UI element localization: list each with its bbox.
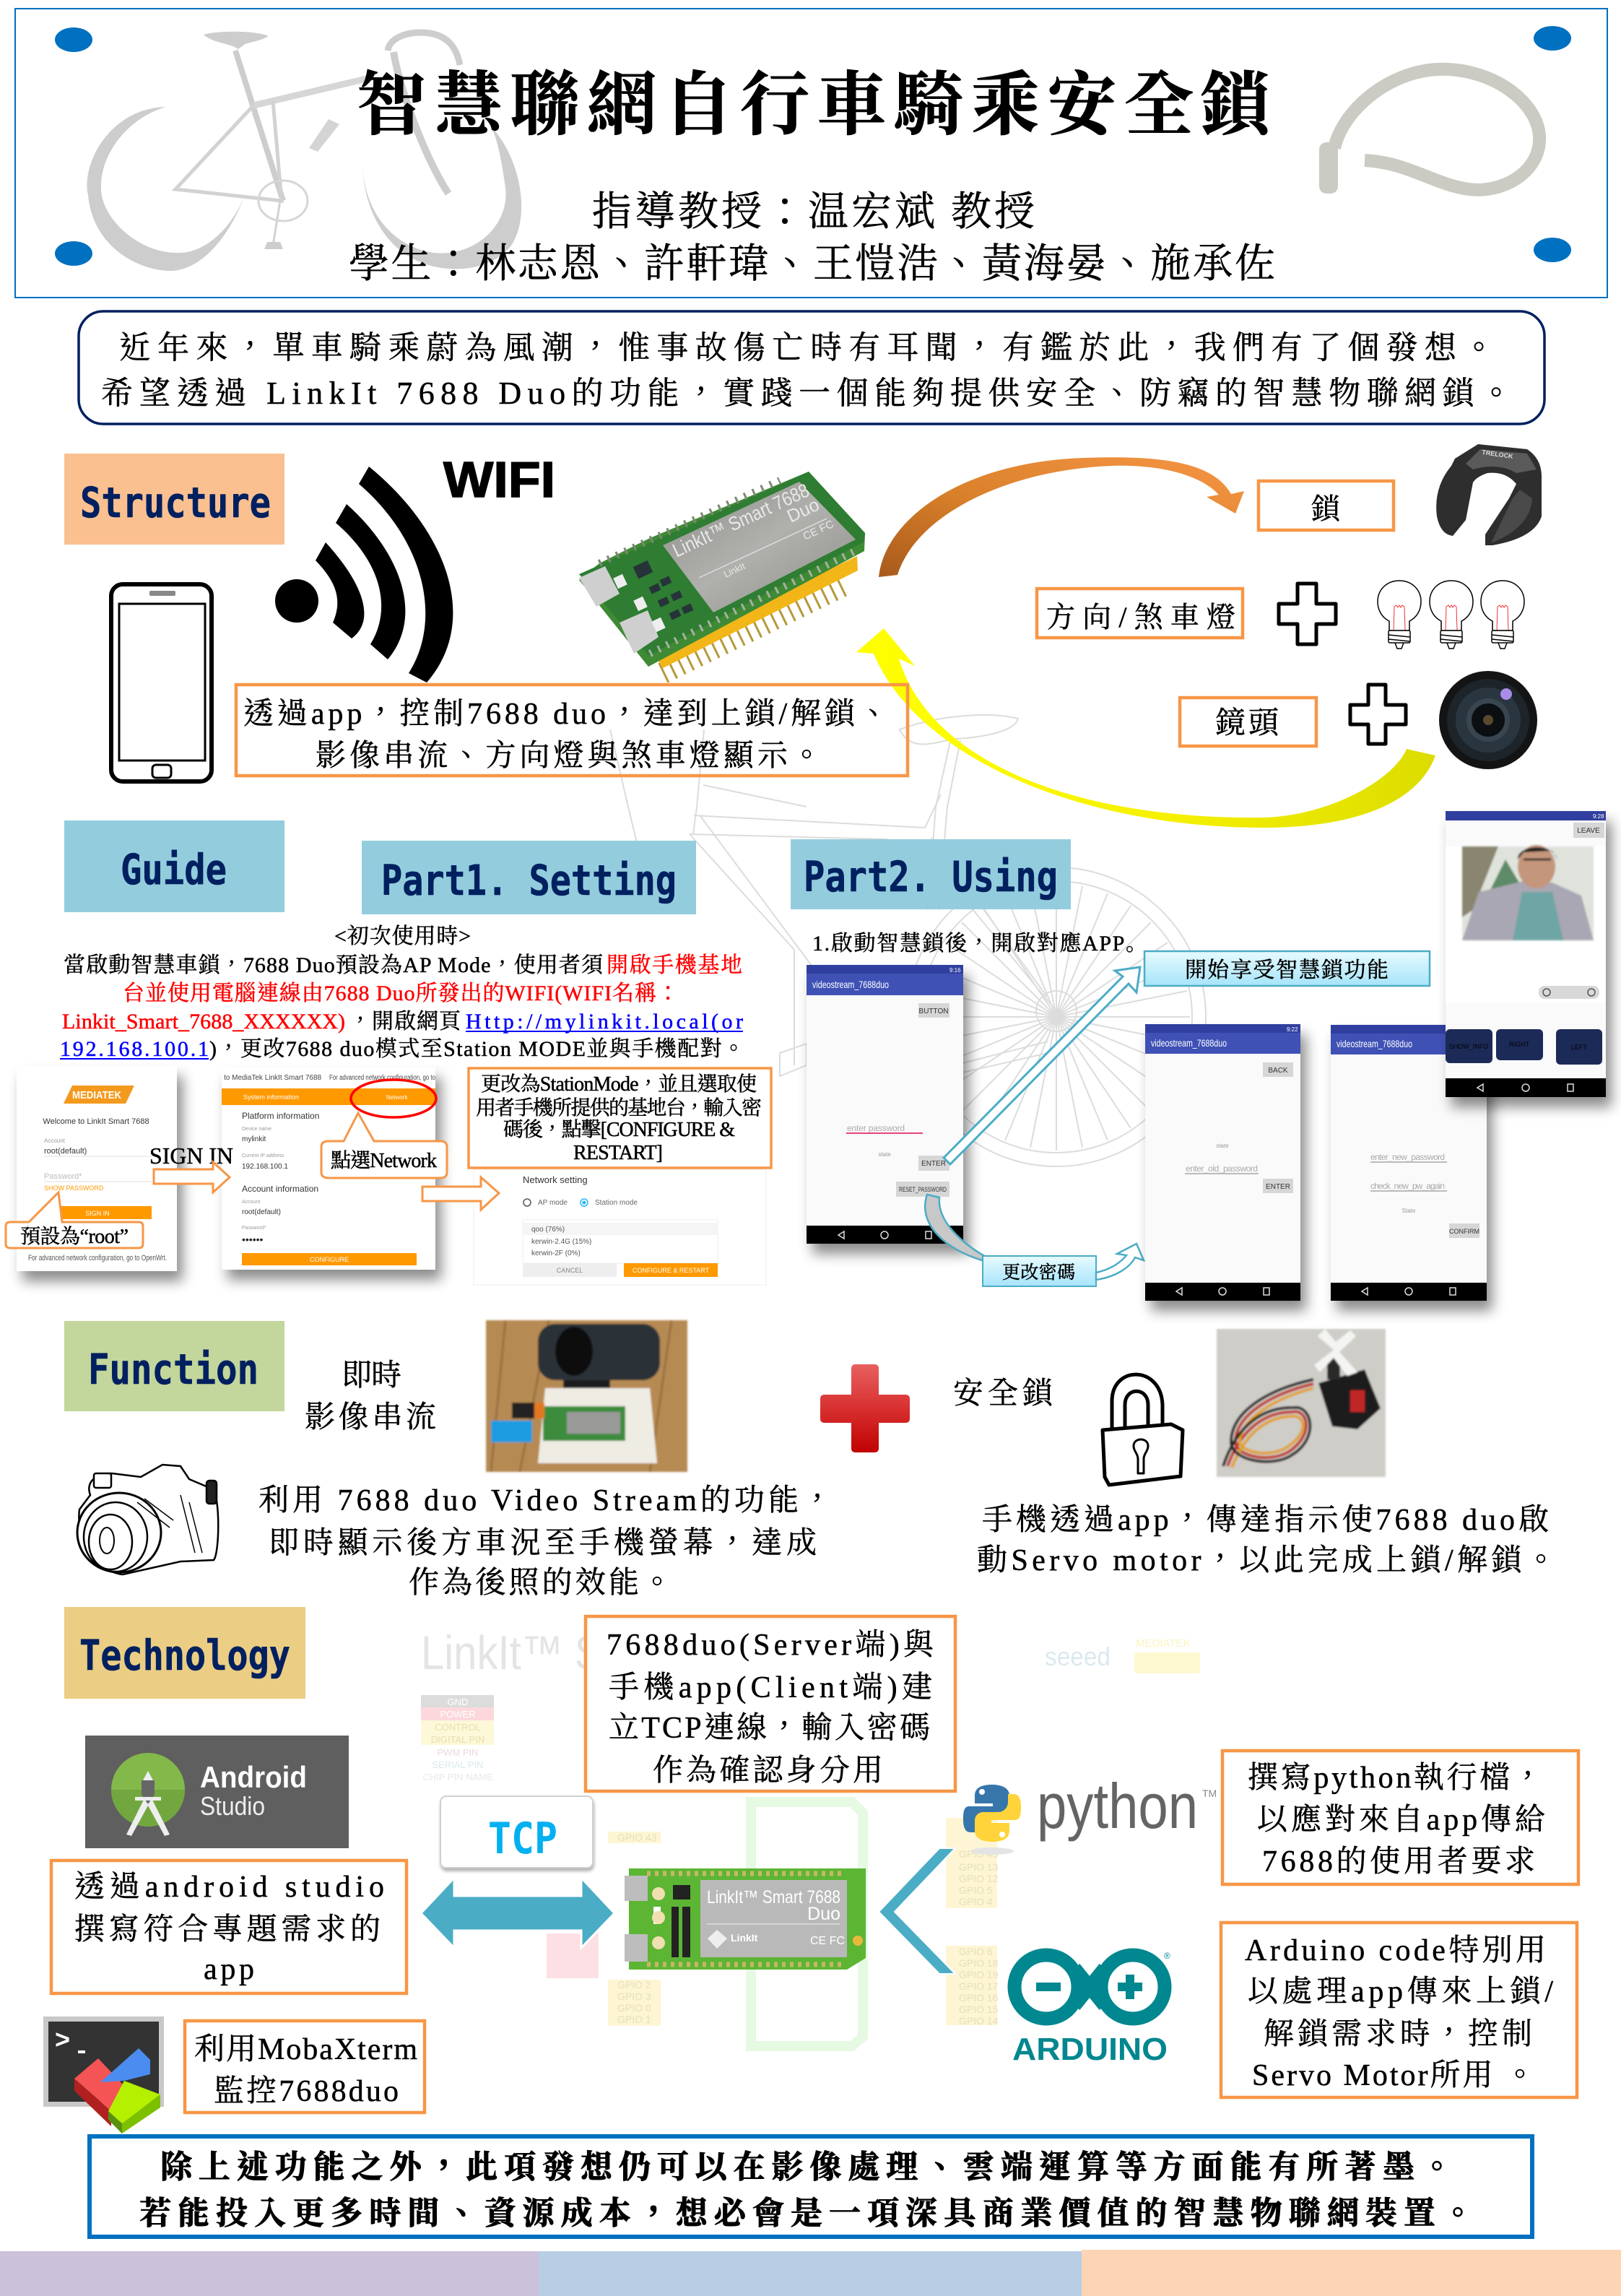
arduino logo: ® [1164, 1951, 1170, 1961]
phone screen: new password: check_new_pw_again [1370, 1181, 1445, 1191]
faded pinout background: GPIO 13 [959, 1861, 999, 1873]
faded pinout background: DIGITAL PIN [431, 1734, 484, 1745]
faded pinout background: GPIO 2 [617, 1979, 651, 1990]
text: tcp connection box: 立TCP連線，輸入密碼 [609, 1711, 930, 1745]
callout: default root: 預設為“root” [20, 1225, 129, 1248]
structure description box: 影像串流、方向燈與煞車燈顯示。 [316, 739, 822, 773]
phone screen: password entry: RESET_PASSWORD [899, 1186, 947, 1193]
screenshot: network setting: kerwin-2.4G (15%) [531, 1238, 591, 1246]
screenshot: sign in [17, 1066, 177, 1271]
advisor line: 指導教授：温宏斌 教授 [591, 190, 1035, 235]
faded pinout background: GPIO 3 [617, 1990, 651, 2002]
screenshot: network setting [474, 1169, 766, 1285]
faded pinout background: GPIO 6 [959, 1946, 993, 1957]
chevron arrow [879, 1848, 955, 1974]
conclusion box: 若能投入更多時間、資源成本，想必會是一項深具商業價值的智慧物聯網裝置。 [139, 2196, 1474, 2231]
safety lock description: 動Servo motor，以此完成上鎖/解鎖。 [977, 1544, 1556, 1577]
screenshot: sign in: root(default) [44, 1147, 87, 1156]
faded pinout background: GND [448, 1697, 468, 1707]
faded pinout background: CHIP PIN NAME [422, 1772, 493, 1782]
function heading: Function [88, 1345, 258, 1394]
zoom control [1539, 986, 1599, 999]
part 1 instructions: Linkit_Smart_7688_XXXXXX) [62, 1010, 345, 1034]
phone screen: password entry: state [878, 1151, 891, 1158]
screenshot: sign in: SIGN IN [85, 1210, 110, 1217]
intro box [79, 311, 1544, 424]
icon: plus outline [1279, 584, 1336, 644]
screenshot: platform information: to MediaTek LinkIt Smart 7688 [224, 1074, 322, 1082]
part 2 heading [791, 839, 1071, 909]
phone screen: new password: State [1402, 1208, 1416, 1214]
bulb 1 [1378, 581, 1421, 649]
guide heading [64, 820, 284, 912]
part 1 instructions [60, 924, 744, 1061]
bulb 3 [1481, 581, 1524, 649]
screenshot: platform information: For advanced network configuration, go to [329, 1074, 435, 1082]
faded pinout background: GPIO 1 [617, 2014, 651, 2025]
phone screen: old password: videostream_7688duo [1151, 1037, 1227, 1049]
android studio logo [85, 1736, 349, 1848]
faded pinout background: GPIO 18 [959, 1957, 999, 1969]
part 2 heading: Part2. Using [804, 852, 1058, 901]
text: python box: 撰寫python執行檔， [1248, 1762, 1543, 1795]
structure description box: 透過app，控制7688 duo，達到上鎖/解鎖、 [243, 697, 889, 731]
screenshot: platform information: Current IP address [242, 1153, 284, 1158]
video stream description: 利用 7688 duo Video Stream的功能， [258, 1484, 833, 1517]
intro text line 2: 希望透過 LinkIt 7688 Duo的功能，實踐一個能夠提供安全、防竊的智慧物聯網鎖。 [101, 376, 1512, 411]
label: direction and brake lights: 方向/煞車燈 [1046, 601, 1235, 633]
screenshot: sign in: For advanced network configuration, go to OpenWrt. [28, 1254, 167, 1262]
structure heading [64, 454, 284, 545]
guide heading: Guide [121, 845, 227, 894]
part 1 heading: Part1. Setting [381, 856, 677, 905]
safety lock description: 手機透過app，傳達指示使7688 duo啟 [982, 1504, 1549, 1537]
text: python box [1222, 1751, 1578, 1884]
phone screen: video stream [1446, 811, 1606, 1097]
icon: mobaxterm [43, 2016, 164, 2133]
phone screen: password entry: BUTTON [919, 1008, 948, 1015]
faded pinout background: seeed [1045, 1642, 1111, 1671]
banner: start using smart lock [1144, 951, 1430, 986]
icon: light bulbs [1378, 581, 1524, 649]
arrow: sign in to network [154, 1162, 230, 1192]
python logo [963, 1770, 1217, 1855]
phone screen: video stream: SHOW_INFO [1449, 1043, 1488, 1050]
screenshot: platform information: 192.168.100.1 [242, 1163, 288, 1171]
icon: plus outline [1350, 685, 1406, 744]
board shield text: LinkIt™ Smart 7688 [669, 480, 812, 561]
students line: 學生：林志恩、許軒瑋、王愷浩、黃海晏、施承佐 [349, 242, 1275, 287]
realtime video stream label [305, 1359, 436, 1434]
label: direction and brake lights [1037, 589, 1243, 638]
box: change password [983, 1256, 1096, 1286]
wifi label: WIFI [443, 451, 555, 508]
phone screen: video stream: RIGHT [1509, 1041, 1529, 1048]
part 1 instructions: Http://mylinkit.local(or [466, 1010, 743, 1034]
corner dots [55, 26, 1571, 266]
text: arduino box: 解鎖需求時，控制 [1264, 2017, 1532, 2051]
video stream description [258, 1484, 833, 1600]
double headed arrow [421, 1878, 614, 1948]
step 1 caption: 1.啟動智慧鎖後，開啟對應APP。 [812, 932, 1147, 956]
structure heading: Structure [80, 478, 271, 527]
phone screen: video stream: LEFT [1571, 1044, 1587, 1051]
screenshot: platform information [222, 1067, 436, 1270]
board horizontal: CE FC [810, 1935, 845, 1947]
text: python box: 7688的使用者要求 [1262, 1845, 1535, 1879]
conclusion box: 除上述功能之外，此項發想仍可以在影像處理、雲端運算等方面能有所著墨。 [160, 2149, 1453, 2185]
safety lock description [977, 1504, 1556, 1577]
icon: mobaxterm: > [55, 2024, 70, 2054]
icon: phone [111, 584, 212, 781]
arrow: reset password to change password [925, 1195, 986, 1260]
tcp key [440, 1796, 593, 1868]
callout: change to station mode: RESTART] [573, 1142, 663, 1164]
photo: servo motor [1217, 1329, 1386, 1477]
phone screen: new password: videostream_7688duo [1337, 1038, 1412, 1049]
android studio logo: Android [200, 1760, 307, 1794]
callout: change to station mode: 碼後，點擊[CONFIGURE & [503, 1118, 735, 1141]
phone screen: password entry: ENTER [921, 1160, 946, 1168]
label: lens: 鏡頭 [1215, 706, 1279, 740]
part 1 heading [362, 841, 696, 914]
phone screen: password entry: videostream_7688duo [812, 979, 889, 990]
screenshot: platform information: System information [243, 1093, 299, 1101]
phone screen: old password: 9:22 [1287, 1026, 1298, 1033]
label: lock: 鎖 [1311, 493, 1341, 525]
video stream description: 即時顯示後方車況至手機螢幕，達成 [269, 1526, 817, 1560]
arduino logo [1012, 1951, 1170, 2067]
faded pinout background: GPIO 5 [959, 1884, 993, 1896]
screenshot: platform information: root(default) [242, 1208, 281, 1216]
footer color strips [0, 2250, 1621, 2296]
screenshot: network setting: CANCEL [557, 1267, 583, 1274]
intro text line 1: 近年來，單車騎乘蔚為風潮，惟事故傷亡時有耳聞，有鑑於此，我們有了個發想。 [119, 330, 1495, 365]
phone screen: old password: state [1216, 1143, 1229, 1149]
screenshot: platform information: mylinkit [242, 1135, 266, 1143]
text: python box: 以應對來自app傳給 [1257, 1803, 1545, 1837]
faded pinout background: SERIAL PIN [432, 1759, 484, 1770]
screenshot: network setting: AP mode [538, 1199, 568, 1207]
phone screen: old password: ENTER [1266, 1183, 1290, 1191]
board horizontal: LinkIt [731, 1932, 758, 1944]
arrow: network to station mode [422, 1177, 499, 1210]
label: lens [1180, 698, 1316, 746]
android studio logo: Studio [200, 1791, 265, 1821]
phone screen: video stream: LEAVE [1577, 827, 1600, 835]
python logo: python [1037, 1770, 1198, 1842]
red highlight ellipse [351, 1080, 436, 1117]
conclusion box [90, 2136, 1532, 2237]
callout: tap network: 點選Network [331, 1149, 437, 1172]
box: change password: 更改密碼 [1002, 1262, 1075, 1283]
screenshot: platform information: Password* [242, 1226, 266, 1231]
text: android studio box: 撰寫符合專題需求的 [74, 1913, 381, 1946]
callout: change to station mode [469, 1068, 771, 1168]
mediatek logo: MEDIATEK [72, 1089, 121, 1101]
phone screen: old password [1145, 1024, 1300, 1301]
faded pinout background [421, 1626, 1200, 2046]
photo: ring lock: TRELOCK [1482, 449, 1514, 460]
board shield text: Duo [784, 495, 822, 527]
function heading [64, 1321, 284, 1411]
part 1 instructions: <初次使用時> [334, 924, 471, 948]
screenshot: platform information: Account information [242, 1184, 318, 1194]
photo: ring lock [1436, 444, 1542, 545]
text: arduino box: 以處理app傳來上鎖/ [1248, 1975, 1553, 2009]
faded pinout background: GPIO 15 [959, 2003, 999, 2015]
text: mobaxterm box: 監控7688duo [214, 2074, 399, 2108]
board horizontal [625, 1868, 866, 1970]
text: android studio box: app [204, 1953, 254, 1986]
text: android studio box [51, 1860, 407, 1993]
faded pinout background: POWER [440, 1709, 476, 1720]
part 1 instructions: 192.168.100.1 [60, 1037, 209, 1061]
title: 智慧聯網自行車騎乘安全鎖 [357, 66, 1273, 144]
phone screen: old password: enter_old_password [1186, 1164, 1258, 1174]
screenshot: platform information: Account [242, 1200, 260, 1205]
technology heading: Technology [79, 1631, 290, 1680]
screenshot: network setting: kerwin-2F (0%) [531, 1249, 581, 1257]
part 1 instructions: 當啟動智慧車鎖，7688 Duo預設為AP Mode，使用者須 [64, 953, 603, 977]
photo: webcam on breadboard [486, 1320, 687, 1472]
faded pinout background: GPIO 12 [959, 1873, 999, 1884]
video frame of a person [1462, 845, 1594, 940]
structure description box [236, 685, 908, 776]
arrow: change password to old password screen [1096, 1244, 1144, 1280]
sign in label: SIGN IN [149, 1143, 233, 1169]
arrow: enter to start [944, 967, 1140, 1164]
faint bicycle background line art [610, 715, 1206, 1166]
screenshot: platform information: Device name [242, 1127, 271, 1132]
screenshot: sign in: Account [44, 1138, 66, 1144]
watermark: bicycle [87, 32, 521, 271]
video stream description: 作為後照的效能。 [409, 1567, 672, 1600]
screenshot: platform information: Network [386, 1094, 408, 1101]
technology heading [64, 1607, 305, 1699]
text: arduino box [1221, 1923, 1577, 2097]
part 1 instructions: 台並使用電腦連線由7688 Duo所發出的WIFI(WIFI名稱： [123, 982, 679, 1005]
realtime video stream label: 即時 [342, 1359, 401, 1392]
faded pinout background: PWM PIN [437, 1747, 479, 1758]
phone screen: new password: enter_new_password [1370, 1152, 1445, 1162]
python logo: TM [1202, 1788, 1217, 1799]
screenshot: network setting: Station mode [595, 1199, 638, 1207]
label: lock [1259, 481, 1394, 530]
screenshot: sign in: Welcome to LinkIt Smart 7688 [43, 1117, 149, 1126]
header panel [15, 9, 1607, 298]
board horizontal: Duo [807, 1904, 840, 1924]
faded pinout background: MEDIATEK [1136, 1637, 1191, 1650]
text: arduino box: Arduino code特別用 [1245, 1934, 1546, 1967]
photo: camera lens [1439, 671, 1537, 769]
safety lock label: 安全鎖 [953, 1377, 1053, 1411]
callout: change to station mode: 用者手機所提供的基地台，輸入密 [476, 1096, 762, 1119]
realtime video stream label: 影像串流 [305, 1401, 436, 1434]
screenshot: sign in: Password* [44, 1172, 82, 1181]
text: tcp connection box: 手機app(Client端)建 [609, 1671, 932, 1704]
part 1 instructions: 開啟手機基地 [607, 953, 742, 977]
board horizontal: LinkIt™ Smart 7688 [707, 1887, 840, 1907]
bulb 2 [1430, 581, 1473, 649]
tcp key: TCP [488, 1814, 557, 1864]
screenshot: platform information: Platform information [242, 1111, 319, 1121]
banner: start using smart lock: 開始享受智慧鎖功能 [1185, 958, 1389, 982]
screenshot: platform information: CONFIGURE [310, 1256, 349, 1263]
phone screen: old password: BACK [1268, 1067, 1288, 1075]
curved yellow arrow [856, 628, 1435, 828]
phone screen: password entry: 9:16 [949, 967, 961, 974]
faded pinout background: LinkIt™ Smart 7688 [421, 1626, 791, 1679]
screenshot: network setting: qoo (76%) [531, 1226, 565, 1234]
faded pinout background: GPIO 14 [959, 2015, 999, 2027]
text: tcp connection box [586, 1616, 955, 1791]
phone screen: password entry [807, 965, 963, 1244]
faded pinout background: GPIO 19 [959, 1969, 999, 1980]
faded pinout background: GPIO 16 [959, 1992, 999, 2003]
part 1 instructions: )，更改7688 duo模式至Station MODE並與手機配對。 [209, 1037, 744, 1061]
screenshot: network setting: Network setting [523, 1174, 588, 1185]
screenshot: network setting: CONFIGURE & RESTART [633, 1267, 710, 1274]
phone screen: new password: CONFIRM [1449, 1228, 1479, 1235]
faded pinout background: GPIO 0 [617, 2002, 651, 2014]
board shield text: LinkIt [722, 560, 747, 580]
part 1 instructions: ，開啟網頁 [349, 1010, 462, 1034]
board shield text: CE FC [801, 518, 836, 543]
icon: wifi signal [275, 467, 453, 683]
callout: tap network [321, 1113, 447, 1178]
icon: red plus [820, 1364, 910, 1452]
phone screen: new password [1331, 1025, 1487, 1301]
faded pinout background: CONTROL [435, 1722, 481, 1733]
text: tcp connection box: 7688duo(Server端)與 [607, 1629, 935, 1662]
icon: padlock [1103, 1374, 1183, 1485]
callout: default root [6, 1192, 143, 1248]
LinkIt board photo [579, 472, 865, 673]
phone screen: video stream: 9:28 [1593, 813, 1604, 820]
screenshot: sign in: SHOW PASSWORD [44, 1184, 104, 1192]
phone screen: password entry: enter password [847, 1123, 905, 1133]
curved orange arrow [879, 457, 1244, 577]
text: tcp connection box: 作為確認身分用 [653, 1754, 883, 1788]
text: mobaxterm box: 利用MobaXterm [194, 2033, 417, 2066]
text: arduino box: Servo Motor所用 。 [1252, 2059, 1535, 2092]
faded pinout background: GPIO 17 [959, 1980, 999, 1992]
faded pinout background: GPIO 45 [959, 1848, 999, 1860]
faded pinout background: GPIO 43 [617, 1832, 657, 1843]
text: mobaxterm box [185, 2021, 425, 2113]
text: android studio box: 透過android studio [74, 1871, 384, 1904]
icon: camera line art [77, 1465, 218, 1574]
screenshot: platform information: •••••• [242, 1234, 264, 1245]
faded pinout background: GPIO 4 [959, 1896, 993, 1907]
mediatek logo [64, 1086, 134, 1104]
arduino logo: ARDUINO [1012, 2032, 1168, 2067]
watermark: cable lock [1319, 69, 1539, 194]
callout: change to station mode: 更改為StationMode，並且選取使 [481, 1073, 757, 1096]
